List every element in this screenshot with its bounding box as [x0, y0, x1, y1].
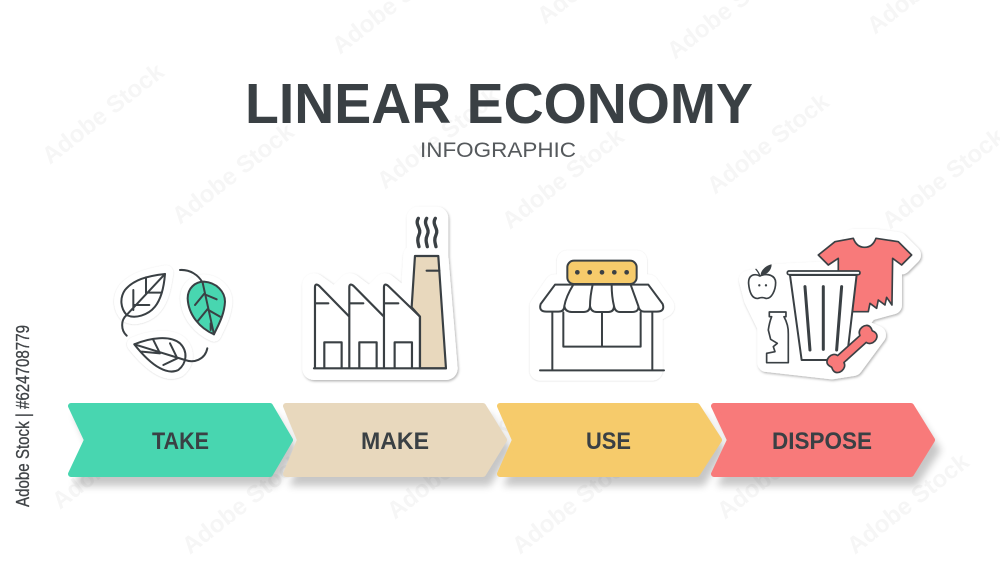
icon: three leaves (take): [121, 270, 225, 372]
faint watermark pattern: Adobe Stock: [37, 58, 170, 170]
label: make: MAKE: [361, 428, 429, 455]
faint watermark pattern: Adobe Stock: [702, 88, 835, 200]
faint watermark pattern: Adobe Stock: [177, 448, 310, 560]
icon: storefront (use): [540, 261, 664, 370]
title: LINEAR ECONOMY: [245, 72, 753, 136]
faint watermark pattern: Adobe Stock: [507, 448, 640, 560]
faint watermark pattern: Adobe Stock: [712, 413, 845, 525]
stock id vertical text: Adobe Stock | #624708779: [13, 325, 33, 507]
factory sticker backing: [314, 218, 446, 368]
arrow: make: [286, 406, 504, 474]
faint watermark pattern: Adobe Stock: [47, 403, 180, 515]
apple: [749, 264, 776, 298]
bone: [825, 323, 879, 375]
leaf outlines: [121, 270, 225, 372]
step arrows row: [71, 406, 941, 486]
faint watermark pattern: Adobe Stock: [167, 118, 300, 230]
faint watermark pattern: Adobe Stock: [372, 83, 505, 195]
awning: [540, 285, 663, 312]
broken bottle: [767, 312, 788, 363]
faint watermark pattern: Adobe Stock: [382, 413, 515, 525]
shadows: [74, 414, 941, 486]
faint watermark pattern: Adobe Stock: [497, 123, 630, 235]
signboard dots: [575, 270, 629, 275]
faint watermark pattern: Adobe Stock: [842, 448, 975, 560]
label: dispose: DISPOSE: [772, 428, 872, 455]
chimney: [412, 256, 446, 368]
t-shirt: [818, 238, 912, 312]
subtitle: INFOGRAPHIC: [420, 139, 576, 162]
trash can body: [790, 275, 857, 360]
signboard: [567, 261, 637, 284]
waste sticker backing: [748, 238, 912, 370]
leaf stickers backing: [121, 273, 225, 372]
trash can lid: [787, 271, 860, 275]
smoke: [417, 218, 437, 247]
icon: factory (make): [314, 218, 446, 368]
store sticker backing: [540, 261, 664, 370]
factory halls: [314, 271, 446, 368]
label: take: TAKE: [152, 428, 209, 455]
trash can ribs: [805, 287, 842, 350]
arrow: use: [500, 406, 719, 474]
arrow: dispose: [714, 406, 932, 474]
arrow: take: [71, 406, 290, 474]
label: use: USE: [586, 428, 631, 455]
icon: waste bin with discarded items (dispose): [748, 238, 912, 375]
store walls and window: [540, 312, 664, 370]
